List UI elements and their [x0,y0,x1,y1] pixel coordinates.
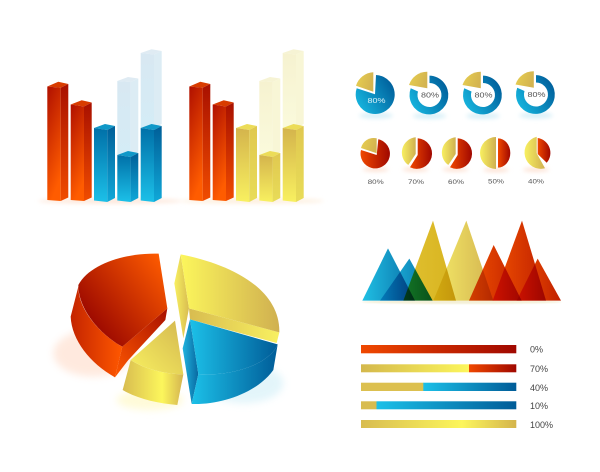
bar: red 1 [189,82,210,201]
small pie 60% [442,137,472,186]
bar: ghost yellow 4 [259,77,280,156]
triangle: blue 2 [380,259,433,301]
bar: yellow 3 [236,124,257,202]
bar: yellow 4 [259,151,280,202]
progress bar 10% [361,401,548,411]
triangle: yellow 2 [433,221,493,301]
bar: ghost yellow 5 [283,49,304,128]
3D pie chart [53,254,283,410]
bar: ghost blue 5 [141,49,162,128]
bar: red 2 [71,100,92,201]
progress bar 100%: 100% [530,420,553,430]
small pie 80%: 80% [368,179,384,186]
blue pie 80%: 80% [368,98,386,105]
slice: red [71,254,167,377]
small pie 50% [480,137,510,186]
bar chart: red and blue [38,49,182,203]
progress bar 70%: 70% [530,364,548,374]
blue donut 3 [516,71,555,118]
triangle: red 3 [517,259,561,301]
small pie 50%: 50% [488,178,504,186]
blue donut 2: 80% [474,92,492,100]
bar: red 2 [213,100,234,201]
bar: blue 3 [94,124,115,202]
bar: red 1 [47,82,68,201]
blue donut 1: 80% [421,92,439,100]
triangle: red 2 [493,221,546,301]
small pie 40% [523,137,550,186]
bar: ghost blue 4 [117,77,138,156]
slice: small yellow [123,321,183,405]
small pie 60%: 60% [448,179,464,186]
blue donut 2 [462,72,502,119]
progress bar 10%: 10% [530,401,548,411]
bar chart: red and yellow [180,49,324,203]
small pie 70%: 70% [408,179,424,186]
triangle: red 1 [469,245,522,301]
slice: blue [183,319,278,404]
small pie 70% [402,137,432,186]
triangle: yellow 1 [403,221,456,301]
progress bar 40%: 40% [530,383,548,393]
blue donut 1 [409,72,448,119]
small pie 40%: 40% [528,178,544,185]
small pie 80% [361,138,390,186]
bar: blue 4 [117,151,138,202]
bar: blue 5 [141,124,162,202]
progress bar 40% [361,383,548,393]
progress bar 0%: 0% [530,344,543,354]
blue pie 80% [356,72,395,119]
bar: yellow 5 [283,124,304,202]
slice: yellow large [174,254,279,343]
progress bar 0% [361,344,543,354]
triangle chart [362,221,562,304]
blue donut 3: 80% [528,92,546,99]
triangle: blue 1 [362,248,415,301]
progress bar 100% [361,420,553,430]
progress bar 70% [361,364,548,374]
